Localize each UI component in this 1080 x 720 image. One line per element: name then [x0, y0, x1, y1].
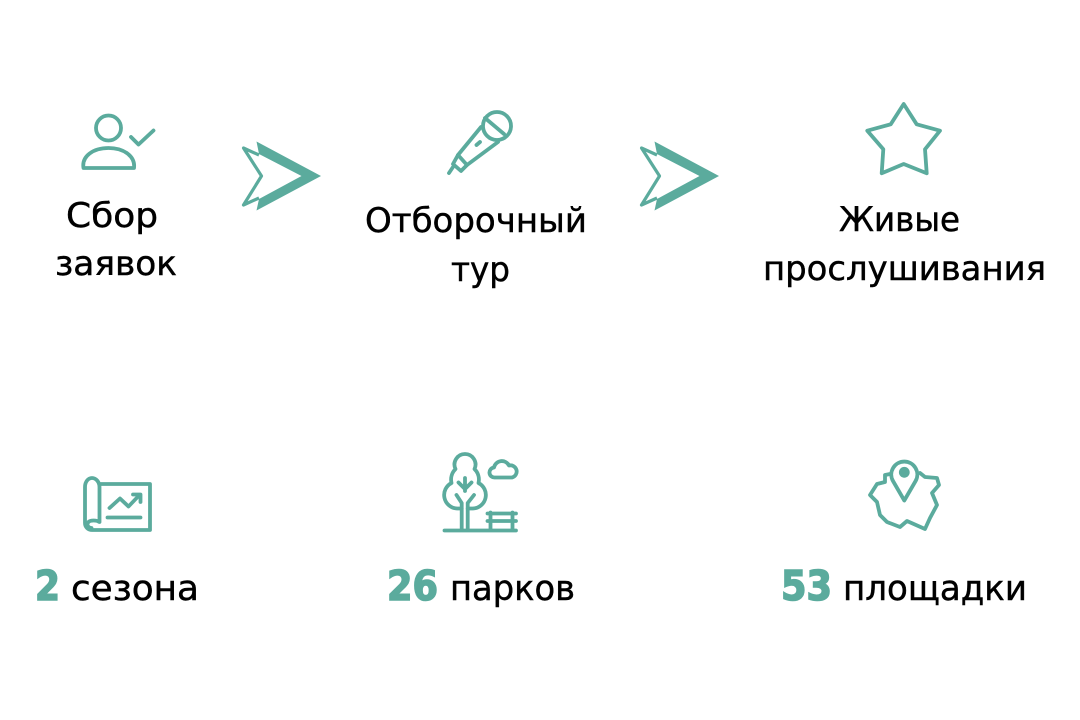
text: step 3 label: Живые	[839, 200, 960, 240]
text: venues stat	[781, 562, 1027, 610]
text: venues stat: площадки	[843, 569, 1027, 609]
icon: star	[867, 104, 940, 173]
text: step 3 label	[763, 200, 1046, 289]
text: parks stat: 26	[387, 562, 438, 610]
text: step 3 label: прослушивания	[763, 249, 1046, 289]
icon: tree, bench and cloud	[444, 454, 517, 530]
text: step 1 label: заявок	[55, 244, 177, 284]
text: venues stat: 53	[781, 562, 832, 610]
text: step 2 label	[365, 201, 587, 290]
arrow: step 2 to step 3	[642, 142, 719, 210]
text: parks stat	[387, 562, 575, 610]
icon: region map with pin	[870, 462, 939, 529]
text: seasons stat: 2	[35, 562, 60, 610]
text: seasons stat	[35, 562, 199, 610]
text: step 2 label: тур	[451, 250, 510, 290]
arrow: step 1 to step 2	[244, 142, 321, 210]
text: seasons stat: сезона	[71, 569, 199, 609]
icon: blueprint with growth chart	[85, 478, 150, 530]
icon: person with check mark	[83, 116, 154, 168]
text: step 1 label	[55, 196, 177, 284]
text: step 2 label: Отборочный	[365, 201, 587, 241]
icon: microphone	[449, 112, 511, 173]
text: parks stat: парков	[450, 569, 575, 609]
text: step 1 label: Сбор	[66, 196, 158, 236]
